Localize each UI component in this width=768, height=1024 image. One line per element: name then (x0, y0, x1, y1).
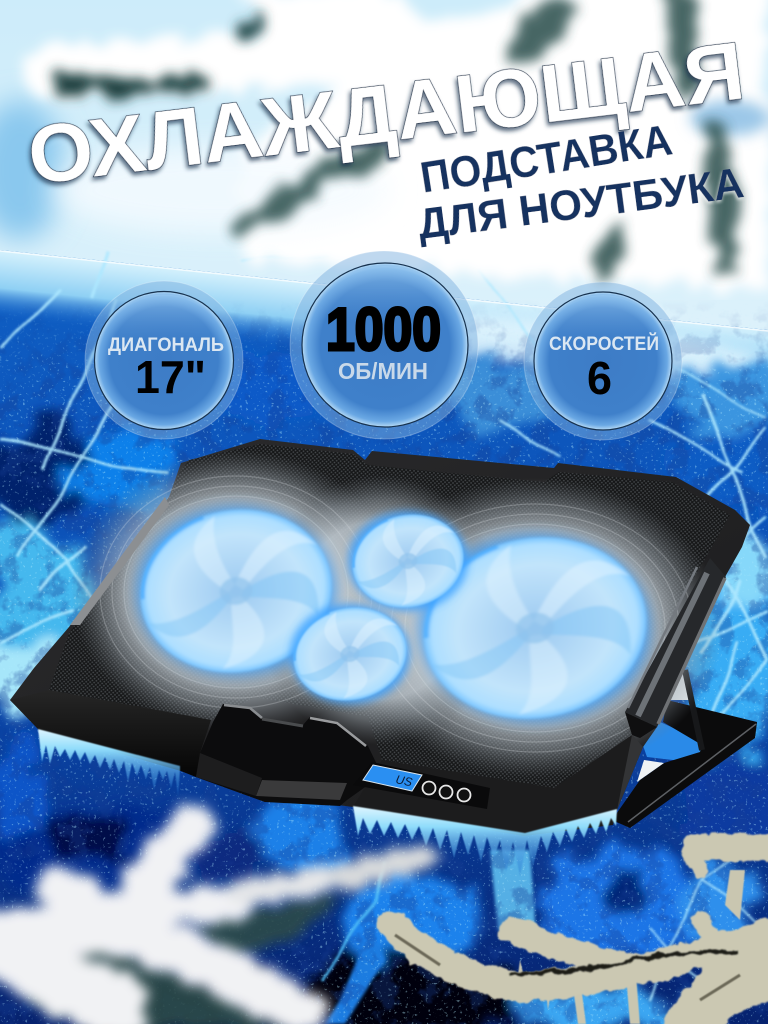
LCD control panel: US (394, 772, 414, 789)
icy branch: bottom right (392, 847, 768, 1024)
front lip left (10, 690, 211, 777)
mesh surface (49, 444, 730, 788)
badge: 6 speeds (524, 282, 682, 440)
badge: 6 speeds: СКОРОСТЕЙ (549, 333, 659, 355)
badge: 1000 rpm: ОБ/МИН (338, 358, 428, 384)
right icicles (353, 806, 617, 876)
badge: diagonal 17 inches: ДИАГОНАЛЬ (108, 335, 224, 356)
snow-covered branch: bottom left (0, 825, 425, 1024)
badge: 6 speeds: 6 (587, 352, 612, 404)
left side rail (70, 497, 169, 625)
badge: diagonal 17 inches: 17" (135, 351, 206, 403)
large fan left (127, 495, 345, 687)
LCD control panel (353, 762, 490, 809)
left icicles (38, 729, 180, 797)
subtitle line 2: ДЛЯ НОУТБУКА (415, 159, 747, 249)
rear base frame (612, 670, 757, 828)
badge: 1000 rpm: 1000 (326, 296, 441, 363)
snow-covered branch: top (47, 0, 768, 290)
right side rail (605, 558, 726, 815)
laptop cooling stand (10, 439, 757, 876)
main title: ОХЛАЖДАЮЩАЯ (23, 26, 749, 202)
subtitle line 1: ПОДСТАВКА (417, 115, 675, 203)
badge: diagonal 17 inches (85, 281, 243, 439)
control hub (196, 704, 382, 806)
small fan bottom (285, 597, 415, 711)
stand top plate (10, 439, 750, 836)
small fan top (344, 504, 472, 618)
large fan right (409, 520, 661, 736)
airflow swirl glow (71, 450, 723, 778)
badge: 1000 rpm (290, 251, 478, 439)
front lip right (353, 735, 632, 836)
